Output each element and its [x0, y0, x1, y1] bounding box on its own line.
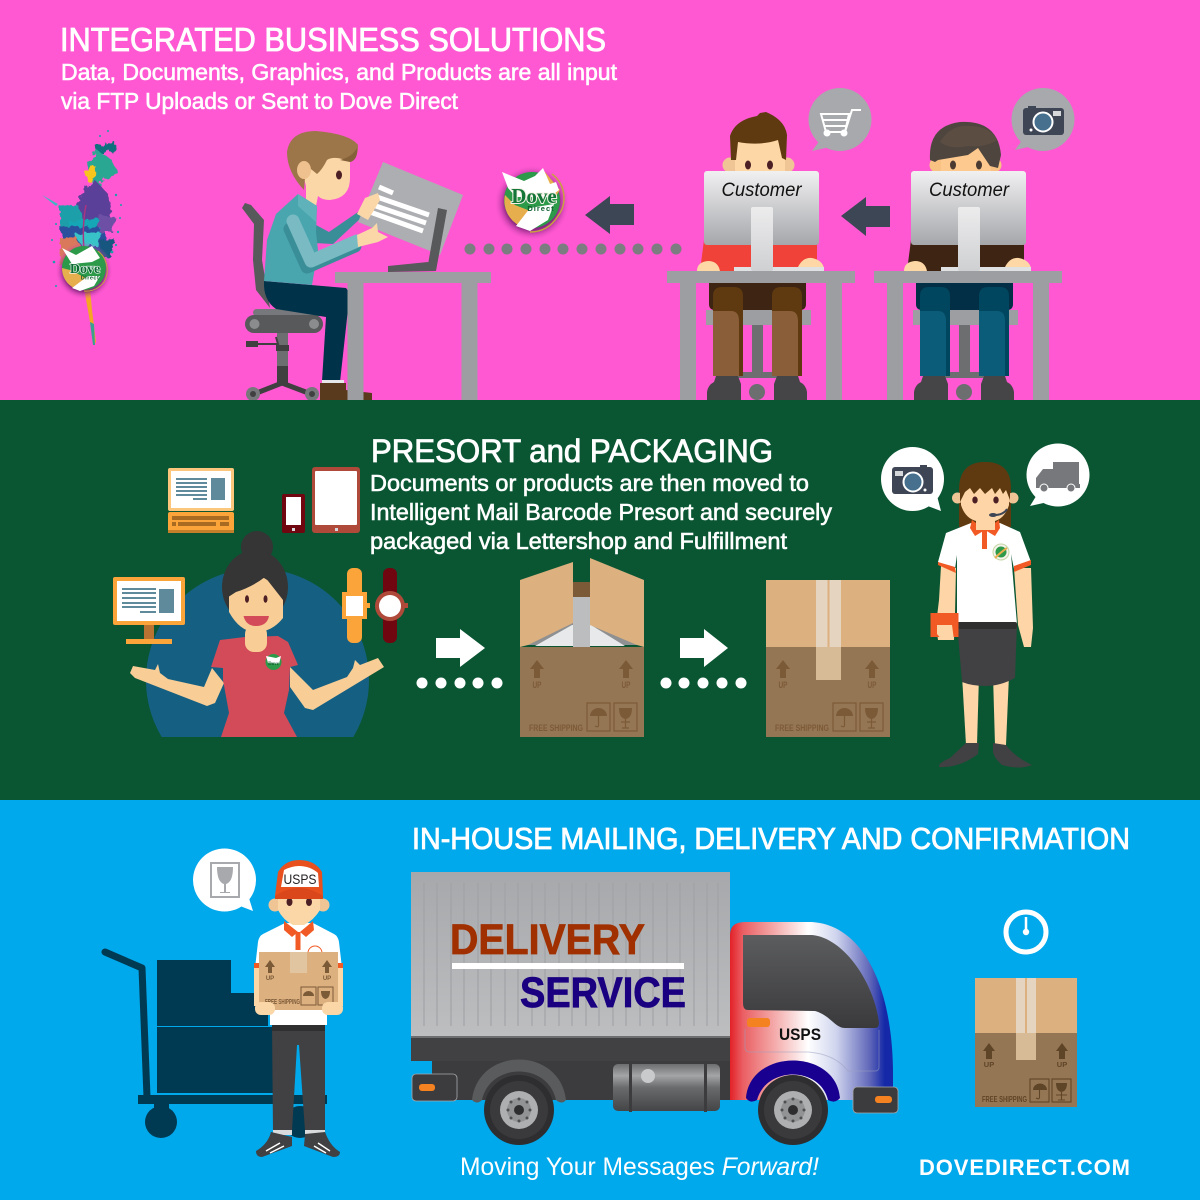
customer two at desk: Customer [929, 180, 1010, 201]
monitor [704, 171, 819, 245]
dotted connector [464, 244, 682, 254]
arms [130, 664, 224, 706]
speech bubble: camera [881, 447, 944, 511]
customer one at desk [667, 88, 872, 400]
box markings: UP [868, 680, 876, 690]
collar [284, 921, 314, 950]
monitor [911, 171, 1026, 245]
text block: presort description: packaged via Lettershop and Fulfillment [370, 528, 787, 554]
laptop [388, 208, 447, 272]
illustration: paint splash quill with logo [42, 130, 122, 345]
logo: dove direct badge [494, 165, 570, 241]
delivery truck [411, 872, 898, 1145]
head [952, 492, 963, 504]
box markings [775, 660, 879, 733]
trousers [709, 283, 806, 310]
folder [930, 613, 958, 637]
icon: open cardboard box [520, 558, 644, 737]
icon: delivered box [975, 978, 1077, 1107]
torso [264, 194, 318, 285]
dress [211, 636, 298, 737]
logo: small dove direct badge: Dove [70, 262, 100, 277]
icon: desktop monitor [113, 577, 185, 644]
ear and eye [297, 161, 311, 179]
shoes [914, 376, 948, 400]
box markings: UP [778, 680, 788, 690]
desk [335, 272, 491, 400]
text block: presort description: Documents or products are then moved to [370, 470, 809, 496]
skirt [957, 623, 1017, 686]
hand truck with boxes [105, 952, 327, 1138]
heading: presort and packaging: PRESORT and PACKAGING [371, 433, 773, 469]
heading: in-house mailing: IN-HOUSE MAILING, DELIVERY AND CONFIRMATION [412, 822, 1130, 856]
rear wheel [484, 1075, 554, 1145]
carried box: UP [266, 976, 274, 982]
logo: small dove direct badge [55, 242, 113, 300]
shirt [907, 240, 1024, 271]
box markings: FREE SHIPPING [775, 723, 829, 733]
logo: small dove direct badge: Direct [81, 276, 99, 282]
text: service: SERVICE [520, 969, 686, 1017]
text: delivery: DELIVERY [450, 916, 645, 964]
front wheel [758, 1075, 828, 1145]
carried box [259, 952, 338, 1010]
panel: presort and packaging [0, 400, 1200, 800]
icon: phone [282, 494, 305, 533]
arrow: between customers [841, 197, 890, 236]
carried box: FREE SHIPPING [265, 999, 300, 1006]
logo: dove direct badge: Dove [511, 184, 557, 208]
polo shirt [255, 923, 342, 968]
dotted connector [660, 678, 746, 688]
text block: presort description [370, 470, 832, 554]
cap [275, 860, 323, 899]
arrow: toward logo [585, 196, 634, 234]
speech bubble: truck [1026, 444, 1090, 506]
shoes [256, 1132, 340, 1157]
heading: integrated business solutions: INTEGRATED BUSINESS SOLUTIONS [60, 22, 606, 59]
fringe [222, 558, 285, 601]
shoes [939, 743, 1032, 768]
arrow: to open box [436, 629, 485, 667]
badge on shirt [308, 946, 322, 960]
face [229, 578, 283, 632]
shoe [320, 383, 372, 400]
delivery man holding box [193, 848, 343, 1157]
desk [667, 271, 855, 400]
desk [874, 271, 1062, 400]
logo badge [993, 544, 1009, 560]
front wheel arch [746, 1060, 840, 1102]
icon: sealed cardboard box [766, 580, 890, 737]
chair [242, 203, 324, 401]
logo badge [266, 654, 282, 670]
chassis [411, 1036, 730, 1100]
box markings: UP [622, 680, 630, 690]
head [303, 150, 350, 206]
hand [937, 625, 954, 640]
logo badge: Dove [268, 662, 280, 667]
chair [913, 310, 1018, 400]
head [930, 158, 944, 172]
polo shirt [938, 523, 1031, 624]
trousers [916, 283, 1013, 310]
rear light [412, 1074, 457, 1101]
text block: input description [61, 59, 618, 114]
headset [990, 509, 1007, 515]
website: DOVEDIRECT.COM [919, 1155, 1130, 1180]
legs [962, 675, 1009, 745]
text block: input description: Data, Documents, Graphics, and Products are all input [61, 59, 618, 85]
far arm [314, 212, 362, 244]
cap: USPS [284, 871, 316, 887]
chair [706, 310, 811, 400]
woman juggling devices [113, 531, 384, 737]
text block: presort description: Intelligent Mail Barcode Presort and securely [370, 499, 832, 525]
icon: laptop [168, 468, 234, 533]
front bumper light [853, 1087, 898, 1113]
hands [357, 193, 380, 220]
blue circle backdrop [146, 572, 369, 737]
box markings: UP [532, 680, 542, 690]
panel: integrated business solutions [0, 0, 1200, 401]
rear fender [472, 1060, 566, 1102]
head [268, 898, 282, 912]
cab: USPS [779, 1025, 821, 1044]
speech bubble: cart [808, 88, 872, 151]
carried box: UP [323, 976, 331, 982]
icon: clock [1006, 912, 1046, 952]
logo: dove direct badge: Direct [527, 204, 555, 213]
tagline: Moving Your Messages Forward! [460, 1153, 819, 1181]
hair back [959, 462, 1011, 527]
box markings: FREE SHIPPING [529, 723, 583, 733]
eyes and mouth [244, 595, 269, 626]
cab [730, 922, 893, 1100]
hands [255, 1002, 275, 1015]
trousers [264, 281, 349, 382]
box markings: FREE SHIPPING [982, 1095, 1027, 1104]
customer two at desk [874, 88, 1074, 400]
box markings: UP [984, 1060, 994, 1069]
shirt [700, 240, 817, 271]
customer one at desk: Customer [722, 180, 802, 201]
illustration: man working at desk with document [242, 131, 491, 401]
trousers [272, 1025, 325, 1131]
hair [930, 122, 1001, 168]
box markings [529, 660, 633, 733]
cargo box [411, 872, 730, 1037]
fringe [960, 462, 1010, 502]
fuel tank [613, 1063, 720, 1112]
hands [904, 261, 927, 271]
hair [730, 112, 787, 160]
panel: in-house mailing, delivery and confirmation [0, 800, 1200, 1200]
speech bubble: camera [1012, 88, 1074, 151]
shoes [707, 376, 741, 400]
box markings [982, 1043, 1068, 1104]
hair [287, 131, 358, 190]
collar [970, 520, 1000, 549]
arms [936, 566, 956, 640]
paper document [358, 162, 463, 255]
text block: input description: via FTP Uploads or Sent to Dove Direct [61, 88, 459, 114]
dotted connector [416, 678, 502, 688]
customer service woman with headset [881, 444, 1090, 768]
hair back [222, 531, 288, 624]
box markings: UP [1057, 1060, 1067, 1069]
neck [245, 625, 267, 652]
hands [697, 261, 720, 271]
speech bubble: fragile [193, 848, 256, 912]
icon: orange watch [342, 568, 370, 643]
arrow: to closed box [680, 629, 728, 667]
icon: tablet [312, 467, 360, 533]
head [722, 158, 738, 172]
near arm [290, 229, 355, 267]
icon: red watch [375, 568, 408, 643]
